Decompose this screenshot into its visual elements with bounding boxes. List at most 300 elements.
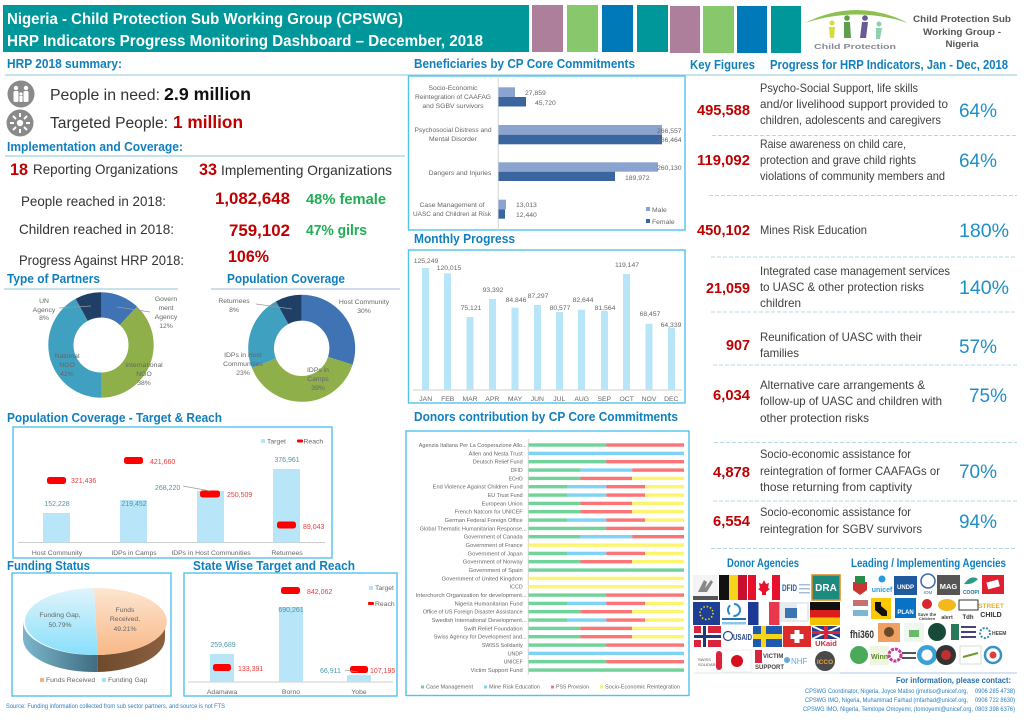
contact information — [803, 675, 1015, 713]
panel: monthly progress chart: 64,339 — [661, 322, 682, 329]
donor chart legend: Mine Risk Education — [489, 684, 540, 690]
logos: donor agencies — [693, 575, 840, 672]
logo: UK aid — [812, 626, 840, 648]
source note: Source: Funding information collected from sub sector partners, and source is not FTS — [6, 703, 225, 710]
heading: monthly progress: Monthly Progress — [414, 232, 515, 246]
flag: Switzerland — [783, 626, 811, 647]
panel: population coverage target and reach chart: 421,660 — [150, 459, 175, 466]
logo: Tdh — [959, 600, 978, 621]
panel: monthly progress chart: APR — [485, 396, 499, 403]
logo: Street Child — [978, 603, 1004, 619]
heading: state wise target and reach: State Wise Target and Reach — [193, 559, 355, 573]
donor labels: Deutsch Relief Fund — [473, 460, 523, 466]
logo: Nigeria crest — [853, 576, 867, 595]
logo: blue arch agency — [985, 647, 1001, 663]
stat: targeted people: 1 million — [173, 112, 243, 132]
panel: state wise target and reach chart: 842,062 — [307, 589, 332, 596]
key figure: reunification: 907 — [726, 337, 750, 354]
key figure: psycho-social support: and/or livelihood support provided to — [760, 97, 948, 111]
logo: UNICEF: unicef — [872, 587, 893, 594]
panel: beneficiaries by CP core commitments chart: Case Management of — [420, 202, 485, 209]
panel: monthly progress chart: SEP — [597, 396, 612, 403]
key figure: psycho-social support: 495,588 — [697, 102, 750, 119]
donor labels: Agenzia Italiana Per La Cooperazione Allo... — [419, 443, 527, 449]
key figure: alternative care — [713, 378, 1007, 425]
heading: population coverage: Population Coverage — [227, 272, 345, 286]
heading: key figures: Key Figures — [690, 58, 755, 72]
panel: beneficiaries by CP core commitments chart: Mental Disorder — [429, 136, 478, 143]
panel: monthly progress chart: 125,249 — [414, 258, 438, 265]
panel: state wise target and reach chart: 66,911 — [320, 668, 341, 675]
donor labels: UNICEF — [504, 660, 523, 666]
logo: Swiss Solidarity: SWISS — [698, 657, 711, 662]
flag: Belgium — [719, 575, 747, 600]
key figure: integrated case management: Integrated case management services — [760, 264, 950, 278]
logo: ICCO — [815, 651, 835, 671]
panel: population coverage target and reach chart: Target — [267, 438, 286, 446]
panel: monthly progress chart: 82,644 — [573, 297, 594, 304]
contact information: CPSWG Coordinator, Nigeria, Joyce Matiso (jmutiso@unicef.org, — [805, 688, 968, 695]
flag: Sweden — [753, 626, 782, 647]
panel: funding status pie: Funds Received — [46, 677, 95, 684]
key figure: alternative care: Alternative care arrangements & — [760, 378, 925, 392]
logo: dark circle agency — [928, 623, 946, 641]
logo: COOPI — [963, 577, 980, 596]
key figure: raise awareness — [697, 137, 997, 183]
panel: monthly progress chart: 119,147 — [615, 262, 639, 269]
panel: state wise target and reach chart: Target — [375, 585, 394, 592]
stat: children reached: Children reached in 2018: — [19, 221, 174, 237]
key figure: reunification — [726, 330, 997, 360]
panel: beneficiaries by CP core commitments chart: 266,464 — [657, 137, 682, 144]
stat: people reached: People reached in 2018: — [21, 193, 166, 209]
logo: IOM — [921, 574, 935, 595]
key figure: SGBV survivors — [713, 505, 997, 536]
key figure: reintegration of CAAFAGs: reintegration of former CAAFAGs or — [760, 464, 940, 478]
key figure: raise awareness: 119,092 — [697, 152, 750, 169]
donor labels: Government of United Kingdom — [442, 576, 523, 582]
mine risk education segments — [528, 452, 684, 655]
panel: beneficiaries by CP core commitments chart: Male — [652, 207, 667, 214]
key figure: reintegration of CAAFAGs: 4,878 — [713, 464, 750, 481]
logo: Alert — [938, 599, 956, 621]
logo: orange agency — [878, 623, 900, 642]
header banner: HRP Indicators Progress Monitoring Dashboard – December, 2018 — [7, 33, 483, 50]
logo: DRA — [812, 575, 840, 600]
donut chart: population coverage: Communities — [223, 361, 263, 368]
panel: funding status pie: 49.21% — [113, 626, 137, 633]
logo: International Rescue Committee — [871, 598, 891, 619]
logo: pale bordered agency — [960, 646, 981, 664]
key figure: psycho-social support: children, adolescents and caregivers — [760, 113, 941, 127]
panel: population coverage target and reach chart: 219,452 — [121, 501, 147, 508]
flag: EU — [693, 602, 720, 625]
logo: pale green agency — [904, 623, 924, 642]
contact information: For information, please contact: — [896, 675, 1011, 685]
key figure: raise awareness: protection and grave child rights — [760, 153, 916, 167]
key figure: psycho-social support — [697, 81, 997, 127]
panel: beneficiaries by CP core commitments chart: 260,130 — [657, 165, 682, 172]
logo: child protection: Child Protection — [814, 42, 897, 51]
donor labels: Government of Canada — [464, 535, 524, 541]
panel: state wise target and reach chart: 690,261 — [278, 607, 304, 614]
panel: monthly progress chart: OCT — [620, 396, 634, 403]
logo: USAID — [724, 632, 752, 642]
panel: beneficiaries by CP core commitments chart: UASC and Children at Risk — [413, 211, 492, 218]
logo: DFID — [781, 575, 811, 600]
logo: hands — [693, 575, 718, 600]
donut chart: type of partners: UN — [39, 298, 49, 305]
logo: UNDP — [894, 576, 917, 595]
panel: population coverage target and reach chart — [13, 427, 332, 558]
logo caption: Nigeria — [946, 39, 979, 50]
logo: small organisation — [853, 600, 868, 616]
header banner — [3, 5, 529, 52]
donut chart: type of partners: NGO — [59, 362, 75, 369]
donut chart: population coverage: Camps — [307, 376, 329, 383]
key figure: reintegration of CAAFAGs: those returning from captivity — [760, 480, 912, 494]
stat: people in need — [50, 84, 251, 104]
donut chart: population coverage — [218, 298, 390, 392]
panel: funding status pie: Received, — [110, 616, 140, 623]
key figure: mines risk education: 180% — [959, 220, 1009, 242]
panel: monthly progress chart: FEB — [441, 396, 455, 403]
stat: implementing organizations: Implementing Organizations — [221, 162, 392, 178]
stat: progress against HRP: 106% — [228, 247, 269, 266]
panel: population coverage target and reach chart: 268,220 — [155, 485, 180, 492]
logo: ECHO EU — [780, 602, 809, 622]
logo: Victim Support: VICTIM — [763, 654, 783, 660]
donut chart: type of partners — [33, 296, 178, 387]
panel: beneficiaries by CP core commitments chart — [408, 76, 685, 230]
panel: population coverage target and reach chart: IDPs in Host Communities — [171, 550, 251, 557]
logo: HEM: HEEM — [992, 631, 1006, 637]
panel: state wise target and reach chart: Borno — [282, 689, 300, 696]
logo: green circle agency — [850, 646, 868, 664]
logo: Save the Children: Save the — [918, 612, 937, 617]
panel: beneficiaries by CP core commitments chart: and SGBV survivors — [422, 103, 484, 110]
donor labels: Global Thematic Humanitarian Response... — [420, 526, 527, 532]
panel: monthly progress chart: 84,846 — [506, 297, 527, 304]
donut chart: type of partners: Agency — [155, 314, 178, 321]
panel: monthly progress chart: JAN — [419, 396, 432, 403]
key figure: reintegration of CAAFAGs — [713, 447, 997, 494]
heading: implementation and coverage: Implementation and Coverage: — [7, 140, 183, 154]
flag: Norway — [694, 626, 721, 647]
panel: beneficiaries by CP core commitments chart: Dangers and Injuries — [429, 170, 492, 177]
donut chart: population coverage: 30% — [357, 308, 371, 315]
donor labels: Swiss Agency for Development and... — [434, 635, 527, 641]
key figure: reunification: 57% — [959, 336, 997, 358]
stat: children reached — [19, 221, 367, 240]
heading: funding status: Funding Status — [7, 559, 90, 573]
panel: population coverage target and reach chart: 376,961 — [274, 457, 300, 464]
stat: people reached — [21, 189, 386, 209]
donut chart: population coverage: Host Community — [339, 299, 390, 306]
donut chart: type of partners: NGO — [136, 371, 152, 378]
header colour blocks — [532, 5, 801, 53]
logo: flower agency — [889, 649, 916, 661]
logo: UNICEF — [872, 576, 893, 594]
panel: population coverage target and reach chart: IDPs in Camps — [111, 550, 157, 557]
stat: reporting organizations: Reporting Organizations — [33, 161, 178, 177]
donut chart: type of partners: Agency — [33, 307, 56, 314]
PSS provision segments — [580, 443, 684, 663]
key figure: psycho-social support: 64% — [959, 100, 997, 122]
icon: people in need — [8, 80, 34, 108]
stat: targeted people — [50, 112, 243, 132]
panel: population coverage target and reach chart: 321,436 — [71, 478, 96, 485]
panel: beneficiaries by CP core commitments chart: 189,972 — [625, 175, 650, 182]
stat: children reached: 47% gilrs — [306, 222, 367, 239]
key figure: integrated case management: 21,059 — [706, 280, 750, 297]
header banner: Nigeria - Child Protection Sub Working Group (CPSWG) — [7, 11, 403, 28]
logo: WINN: Winn — [871, 654, 888, 661]
panel: monthly progress chart: 87,297 — [528, 293, 549, 300]
logos: leading and implementing agencies — [850, 574, 1006, 665]
logo: MAG: MAG — [940, 582, 957, 591]
panel: monthly progress chart: MAR — [462, 396, 478, 403]
logo: NHF: NHF — [791, 657, 808, 666]
key figure: reunification: Reunification of UASC with their — [760, 330, 922, 344]
panel: beneficiaries by CP core commitments chart: 45,720 — [535, 100, 556, 107]
logo: end violence against children — [722, 604, 746, 624]
contact information: 0908 722 8630) — [975, 697, 1015, 704]
donor labels: DFID — [511, 468, 523, 474]
panel: state wise target and reach chart: Reach — [375, 601, 395, 608]
case management segments — [528, 443, 684, 672]
panel: state wise target and reach chart: Adamawa — [207, 689, 237, 696]
logo: USAID: USAID — [733, 633, 752, 642]
contact information: CPSWG IMO, Nigeria, Muhammad Farhad (mfarhad@unicef.org, — [805, 697, 968, 704]
logo: Save the Children: Children — [919, 616, 936, 621]
key figure: raise awareness: violations of community members and — [760, 169, 945, 183]
stat: people reached: 48% female — [306, 191, 386, 208]
flag: France — [748, 602, 780, 625]
logo: UK aid: UKaid — [815, 639, 837, 648]
heading: donor agencies: Donor Agencies — [727, 558, 799, 570]
contact information: CPSWG IMO, Nigeria, Temitope Omoyemi, (tomoyemi@unicef.org, — [803, 706, 973, 713]
panel: donors contribution chart — [406, 431, 689, 696]
heading: HRP 2018 summary: HRP 2018 summary: — [7, 57, 122, 71]
logo: MAG — [937, 575, 960, 595]
donut chart: type of partners: International — [125, 362, 163, 369]
donut chart: type of partners: Govern — [155, 296, 177, 303]
socio-economic reintegration segments — [528, 477, 684, 638]
panel: population coverage target and reach chart: Reach — [304, 438, 323, 446]
panel: state wise target and reach chart: 133,391 — [238, 666, 263, 673]
stat: people in need: 2.9 million — [164, 84, 251, 104]
logo: Swiss Solidarity — [698, 651, 722, 670]
logo: FHI 360: fhi360 — [850, 629, 874, 641]
panel: monthly progress chart: 81,564 — [595, 305, 616, 312]
donor labels: Office of US Foreign Disaster Assistance — [423, 610, 523, 616]
panel: beneficiaries by CP core commitments chart: 266,557 — [657, 128, 682, 135]
logo: red agency — [982, 575, 1004, 594]
panel: funding status pie — [12, 573, 171, 696]
key figure: raise awareness: 64% — [959, 150, 997, 172]
donor labels: French Natcom for UNICEF — [455, 510, 523, 516]
donut chart: type of partners: 12% — [159, 323, 173, 330]
logo: Tdh: Tdh — [962, 615, 974, 621]
donor labels: EU Trust Fund — [488, 493, 523, 499]
logo: HEM — [980, 628, 1006, 638]
panel: beneficiaries by CP core commitments chart: 12,440 — [516, 212, 537, 219]
donor chart legend: Socio-Economic Reintegration — [605, 684, 680, 690]
donor labels: Government of France — [466, 543, 523, 549]
key figure: alternative care: follow-up of UASC and children with — [760, 394, 942, 408]
panel: monthly progress chart: 80,577 — [550, 305, 571, 312]
logo: UNDP: UNDP — [897, 585, 914, 591]
panel: funding status pie: Funding Gap — [108, 677, 148, 684]
panel: state wise target and reach chart: 107,195 — [370, 668, 395, 675]
stat: people in need: People in need: — [50, 87, 160, 104]
key figure: reintegration of CAAFAGs: 70% — [959, 461, 997, 483]
key figure: mines risk education: Mines Risk Education — [760, 223, 867, 237]
logo: blue circle agency — [917, 645, 937, 665]
donor labels: Swift Relief Foundation — [464, 626, 523, 632]
key figure: integrated case management: to UASC & other protection risks — [760, 280, 924, 294]
stat: progress against HRP — [19, 247, 269, 268]
donor labels — [416, 443, 527, 674]
donor labels: German Federal Foreign Office — [445, 518, 523, 524]
donor labels: Swedish International Development... — [432, 618, 527, 624]
key figure: SGBV survivors: Socio-economic assistance for — [760, 505, 911, 519]
key figure: alternative care: 6,034 — [713, 387, 751, 404]
panel: monthly progress chart: 68,457 — [640, 311, 661, 318]
donor chart legend: Case Management — [426, 684, 473, 690]
logo: American University of Nigeria — [951, 624, 976, 640]
donor chart legend: PSS Provision — [556, 684, 589, 690]
logo: Victim Support: SUPPORT — [755, 665, 784, 671]
key figure: alternative care: other protection risks — [760, 411, 869, 425]
key figure: reunification: families — [760, 346, 799, 360]
panel: state wise target and reach chart: 259,689 — [210, 642, 236, 649]
logo: WINN — [870, 646, 889, 665]
key figure: SGBV survivors: 6,554 — [713, 513, 751, 530]
panel: beneficiaries by CP core commitments chart: Female — [652, 219, 675, 226]
heading: beneficiaries: Beneficiaries by CP Core Commitments — [414, 57, 635, 71]
heading: population coverage target and reach: Population Coverage - Target & Reach — [7, 411, 222, 425]
contact information: 0803 398 6376) — [975, 706, 1015, 713]
logo: Street Child: STREET — [978, 603, 1004, 610]
panel: monthly progress chart: 75,121 — [461, 305, 482, 312]
logo: Plan: PLAN — [897, 610, 914, 616]
panel: beneficiaries by CP core commitments chart: Socio-Economic — [428, 85, 478, 92]
donor labels: Government of Norway — [463, 560, 523, 566]
logo: dark red circle agency — [936, 645, 956, 665]
heading: type of partners: Type of Partners — [7, 272, 100, 286]
donor labels: Interchurch Organization for development... — [416, 593, 527, 599]
panel: population coverage target and reach chart: Returnees — [271, 550, 303, 557]
panel: monthly progress chart: AUG — [574, 396, 589, 403]
logo: Alert: alert — [941, 615, 953, 621]
donut chart: type of partners: 8% — [39, 315, 49, 322]
key figure: integrated case management: 140% — [959, 277, 1009, 299]
key figure: integrated case management: children — [760, 296, 801, 310]
panel: population coverage target and reach chart: Host Community — [32, 550, 83, 557]
donut chart: population coverage: Returnees — [218, 298, 250, 305]
logo: Victim Support — [755, 650, 784, 671]
stat: children reached: 759,102 — [229, 221, 290, 240]
panel: monthly progress chart: NOV — [642, 396, 657, 403]
donor labels: Nigeria Humanitarian Fund — [455, 601, 523, 607]
donut chart: population coverage: IDPs in — [307, 367, 329, 374]
key figure: integrated case management — [706, 264, 1009, 310]
panel: monthly progress chart: DEC — [664, 396, 679, 403]
donut chart: population coverage: 23% — [236, 370, 250, 377]
logo: ICCO: ICCO — [817, 659, 833, 666]
key figure: psycho-social support: Psycho-Social Support, life skills — [760, 81, 918, 95]
logo: child protection — [805, 10, 908, 51]
logo caption: Working Group - — [923, 27, 1001, 38]
panel: funding status pie: Funding Gap, — [39, 612, 81, 619]
panel: population coverage target and reach chart: 152,228 — [44, 501, 70, 508]
donut chart: type of partners: National — [55, 353, 80, 360]
logo: Plan — [895, 598, 916, 618]
key figure: raise awareness: Raise awareness on child care, — [760, 137, 906, 151]
logo caption — [913, 14, 1011, 50]
flag: Japan — [723, 650, 751, 672]
donor labels: Victim Support Fund — [471, 668, 523, 674]
panel: monthly progress chart: JUN — [531, 396, 544, 403]
donut chart: population coverage: IDPs in Host — [224, 352, 262, 359]
logo: IOM: IOM — [924, 590, 933, 595]
panel: beneficiaries by CP core commitments chart: Reintegration of CAAFAG — [415, 94, 491, 101]
panel: monthly progress chart: 120,015 — [437, 265, 461, 272]
donut chart: population coverage: 39% — [311, 385, 325, 392]
flag: Germany — [810, 602, 840, 625]
panel: state wise target and reach chart — [184, 573, 397, 696]
donor labels: ICCD — [510, 585, 523, 591]
stat: targeted people: Targeted People: — [50, 115, 168, 132]
donor labels: End Violence Against Children Fund — [433, 485, 523, 491]
key figure: mines risk education: 450,102 — [697, 222, 750, 239]
panel: beneficiaries by CP core commitments chart: 27,859 — [525, 90, 546, 97]
donor labels: UNDP — [508, 651, 523, 657]
icon: targeted people — [6, 110, 34, 136]
panel: funding status pie: Funds — [116, 607, 135, 614]
key figure: reintegration of CAAFAGs: Socio-economic assistance for — [760, 447, 911, 461]
donor chart legend — [421, 684, 680, 690]
logo: DFID: DFID — [782, 583, 797, 593]
panel: monthly progress chart: 93,392 — [483, 287, 504, 294]
donut chart: population coverage: 8% — [229, 307, 239, 314]
panel: monthly progress chart: MAY — [508, 396, 523, 403]
donor labels: European Union — [482, 501, 523, 507]
stat: progress against HRP: Progress Against HRP 2018: — [19, 252, 184, 268]
donor labels: Government of Japan — [468, 551, 523, 557]
panel: beneficiaries by CP core commitments chart: 13,013 — [516, 202, 537, 209]
panel: state wise target and reach chart: Yobe — [351, 689, 367, 696]
logo caption: Child Protection Sub — [913, 14, 1011, 25]
heading: donors contribution: Donors contribution by CP Core Commitments — [414, 410, 678, 424]
donut chart: type of partners: 38% — [137, 380, 151, 387]
logo: Swiss Solidarity: SOLIDARITY — [698, 662, 722, 667]
donut chart: type of partners: 42% — [60, 371, 74, 378]
donor labels: Government of Spain — [469, 568, 523, 574]
panel: funding status pie: 50.79% — [48, 622, 72, 629]
panel: beneficiaries by CP core commitments chart: Psychosocial Distress and — [414, 127, 492, 134]
donut chart: type of partners: ment — [158, 305, 174, 312]
logo: NHF — [784, 657, 808, 666]
logo: DRA: DRA — [815, 583, 837, 594]
panel: monthly progress chart: JUL — [553, 396, 566, 403]
key figure: mines risk education — [697, 220, 1009, 242]
panel: population coverage target and reach chart: 89,043 — [303, 524, 325, 531]
panel: monthly progress chart — [408, 250, 685, 403]
flag: Canada — [748, 575, 780, 600]
